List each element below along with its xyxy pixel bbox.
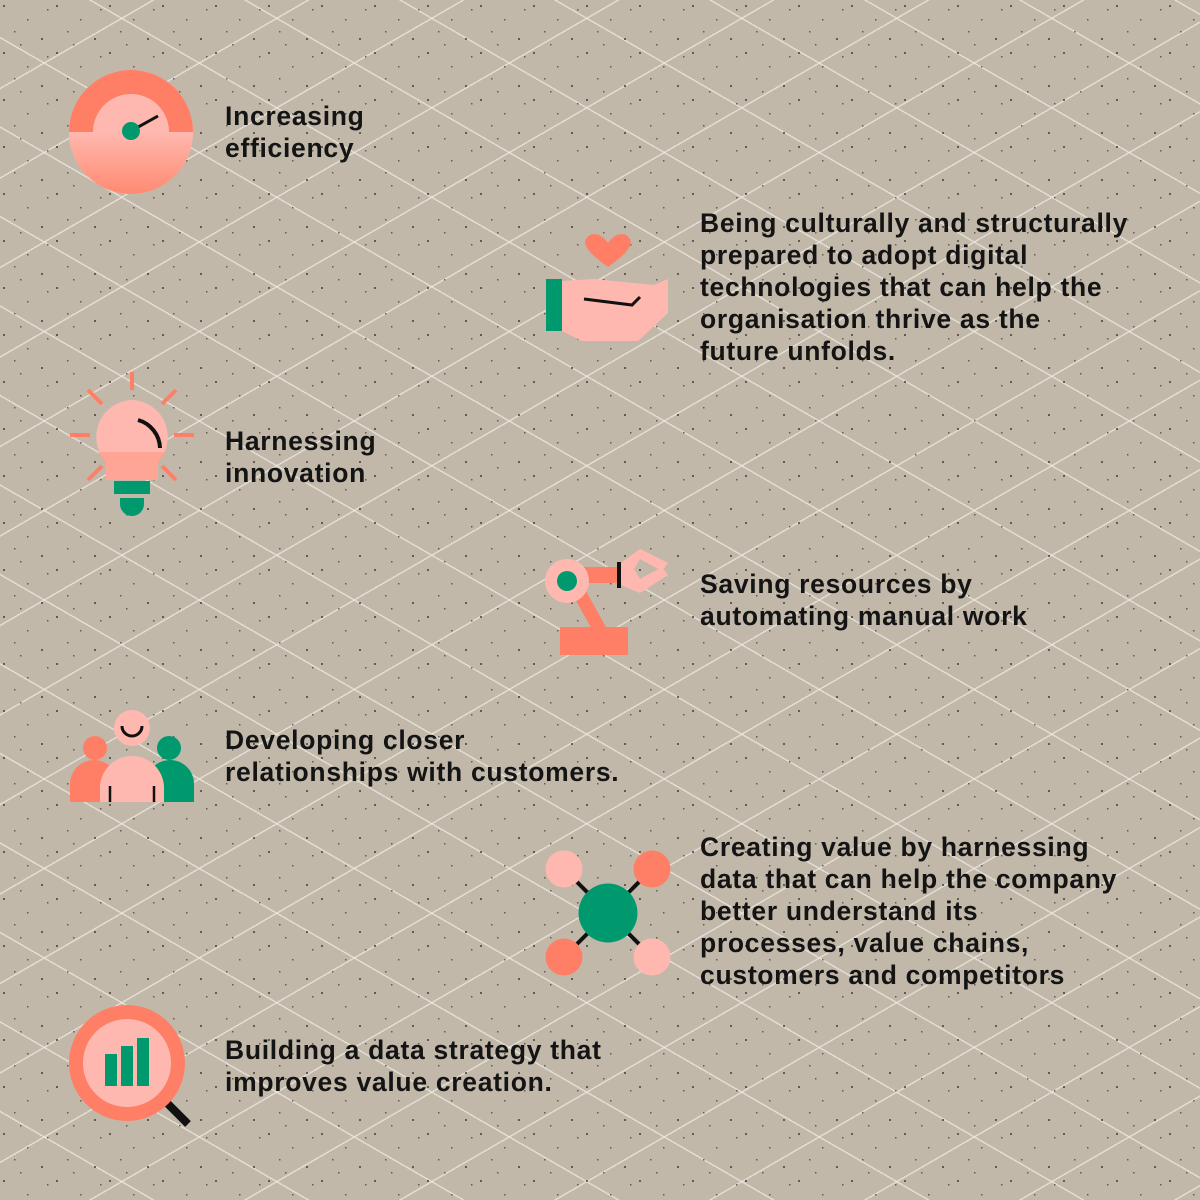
text: creating value: processes, value chains, — [700, 928, 1029, 958]
text: saving resources — [700, 569, 1028, 631]
text: saving resources: automating manual work — [700, 601, 1028, 631]
text: creating value: better understand its — [700, 896, 978, 926]
text: data strategy — [225, 1035, 602, 1097]
icon: light bulb — [70, 372, 194, 516]
text: creating value — [700, 832, 1117, 990]
icon: data network — [546, 850, 670, 976]
icon: gauge — [69, 70, 193, 194]
text: culturally prepared: future unfolds. — [700, 336, 896, 366]
text: creating value: data that can help the company — [700, 864, 1117, 894]
text: developing relationships: relationships with customers. — [225, 757, 619, 787]
text: increasing efficiency — [225, 101, 365, 163]
icon: hand with heart — [546, 234, 668, 341]
text: culturally prepared: technologies that can help the — [700, 272, 1102, 302]
text: increasing efficiency: efficiency — [225, 133, 354, 163]
text: harnessing innovation: Harnessing — [225, 426, 376, 456]
text: developing relationships: Developing closer — [225, 725, 465, 755]
icon: robot arm — [545, 549, 668, 655]
text: harnessing innovation — [225, 426, 376, 488]
text: increasing efficiency: Increasing — [225, 101, 365, 131]
text: data strategy: Building a data strategy that — [225, 1035, 602, 1065]
text: data strategy: improves value creation. — [225, 1067, 553, 1097]
text: developing relationships — [225, 725, 619, 787]
icon: magnifier chart — [69, 1005, 191, 1127]
text: creating value: customers and competitors — [700, 960, 1065, 990]
text: harnessing innovation: innovation — [225, 458, 366, 488]
text: saving resources: Saving resources by — [700, 569, 973, 599]
icon: people — [70, 710, 194, 802]
text: culturally prepared — [700, 208, 1128, 366]
text: creating value: Creating value by harnessing — [700, 832, 1089, 862]
text: culturally prepared: prepared to adopt digital — [700, 240, 1028, 270]
text: culturally prepared: Being culturally and structurally — [700, 208, 1128, 238]
text: culturally prepared: organisation thrive as the — [700, 304, 1041, 334]
